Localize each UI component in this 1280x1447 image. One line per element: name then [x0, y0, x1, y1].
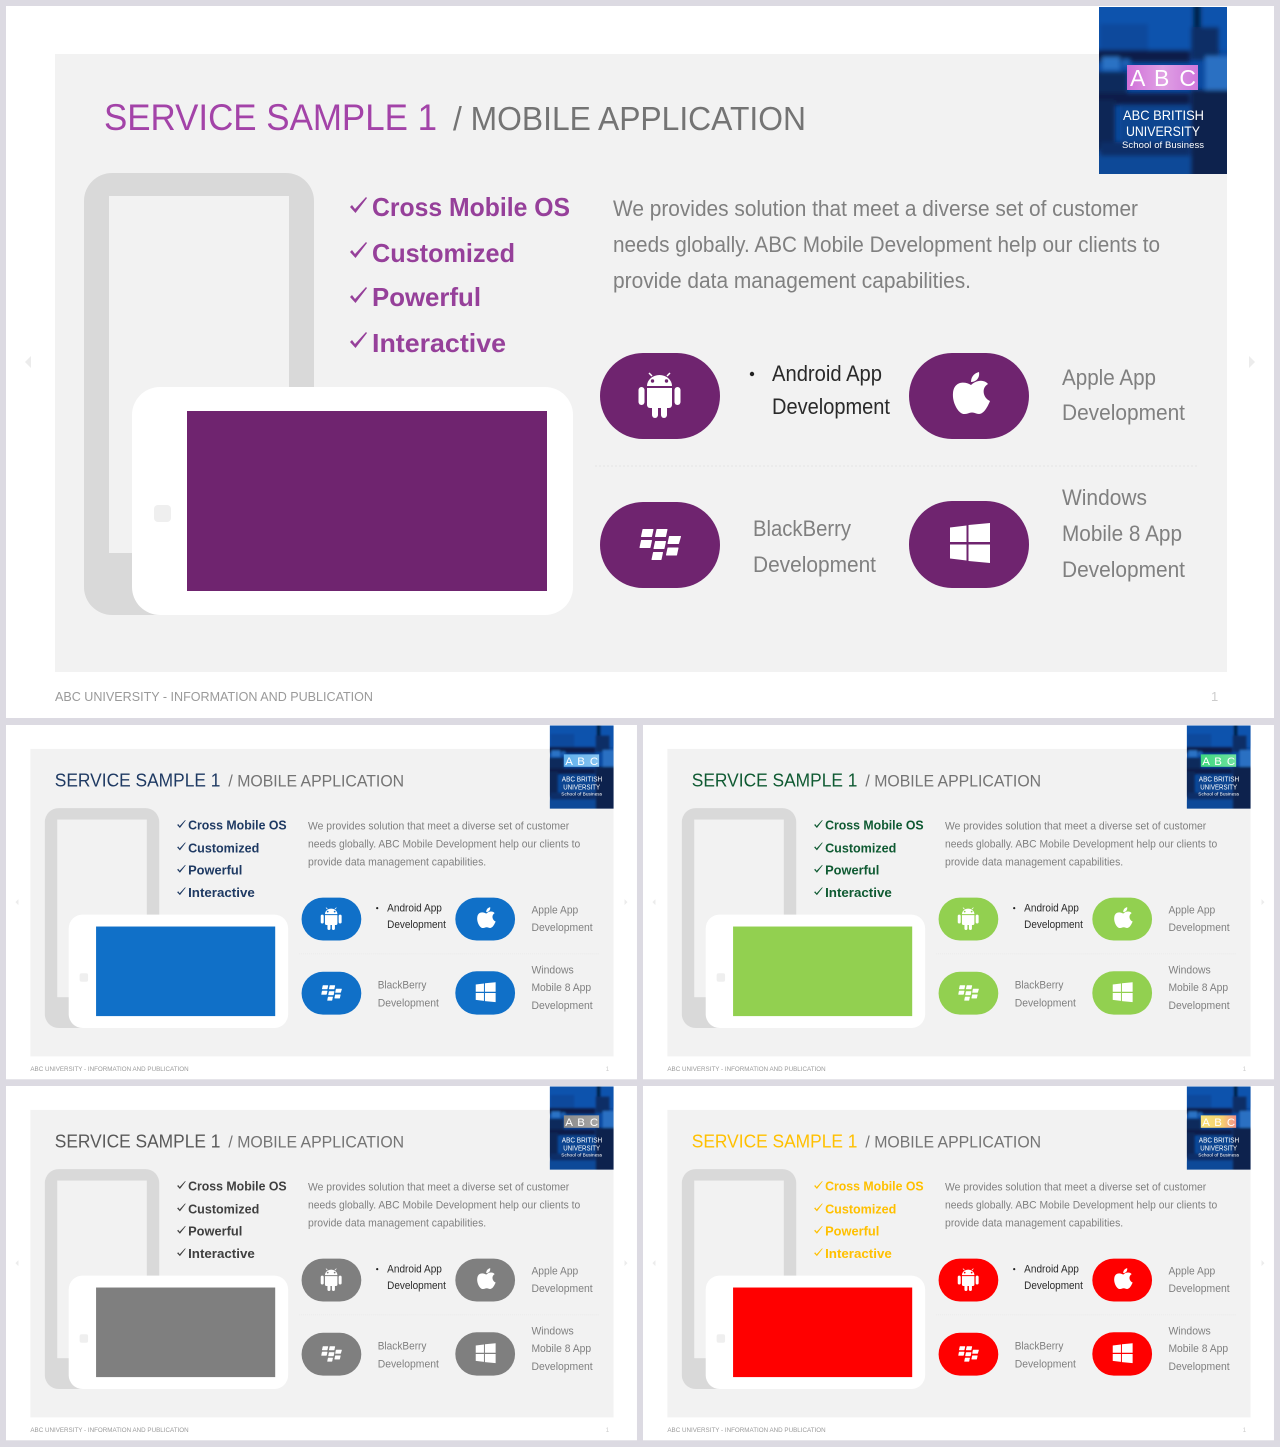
description text: provide data management capabilities. [945, 1217, 1123, 1229]
portrait phone [45, 1169, 159, 1389]
subtitle: / MOBILE APPLICATION [865, 773, 1041, 791]
label: windows [1168, 1325, 1230, 1373]
icon: windows [1092, 971, 1152, 1015]
slide: red and yellow [643, 1085, 1274, 1440]
description text: We provides solution that meet a diverse set of customer [945, 820, 1207, 832]
content panel [30, 1110, 614, 1417]
feature checklist: Cross Mobile OS [825, 1178, 924, 1193]
page number: 1 [1243, 1427, 1247, 1434]
slide: green [643, 724, 1274, 1079]
icon: android [302, 898, 361, 940]
feature checklist: Customized [825, 1201, 896, 1216]
slide background [643, 725, 1274, 1079]
label: windows [1168, 964, 1230, 1012]
subtitle: / MOBILE APPLICATION [228, 773, 404, 791]
feature checklist: Interactive [825, 1246, 892, 1261]
portrait phone [682, 1169, 796, 1389]
icon: android [939, 1259, 998, 1301]
badge: ABC British University: School of Business [1198, 1153, 1240, 1159]
portrait phone [682, 808, 796, 1028]
label: android: Development [1024, 919, 1083, 931]
slide background [6, 1086, 637, 1440]
description text [945, 1181, 1217, 1229]
title: SERVICE SAMPLE 1 [692, 1131, 857, 1152]
landscape tablet [69, 915, 288, 1028]
label: apple: Development [1168, 922, 1230, 934]
label: android: Android App [387, 1264, 442, 1276]
label: apple: Development [531, 922, 593, 934]
page number: 1 [606, 1066, 610, 1073]
badge: ABC British University [1095, 3, 1231, 178]
content panel [30, 749, 614, 1056]
feature checklist: Cross Mobile OS [825, 817, 924, 832]
label: android: Development [387, 919, 446, 931]
badge: ABC British University: School of Business [1122, 140, 1204, 151]
label: android [750, 361, 890, 419]
badge: ABC British University [1185, 1085, 1253, 1172]
subtitle: / MOBILE APPLICATION [228, 1134, 404, 1152]
label: apple [531, 1266, 593, 1295]
description text: provide data management capabilities. [613, 268, 971, 293]
arrow: previous [652, 899, 655, 905]
label: blackberry: Development [753, 552, 876, 577]
label: apple [1062, 365, 1185, 425]
badge: ABC British University: ABC BRITISH [1123, 107, 1204, 123]
arrow: next [625, 1260, 628, 1266]
page number: 1 [1211, 689, 1218, 704]
label: windows [531, 1325, 593, 1373]
feature checklist: Customized [188, 1201, 259, 1216]
label: blackberry: BlackBerry [753, 516, 851, 541]
footer: ABC UNIVERSITY - INFORMATION AND PUBLICATION [55, 689, 373, 704]
arrow: next [1262, 1260, 1265, 1266]
description text [945, 820, 1217, 868]
badge: ABC British University: A B C [565, 756, 598, 768]
description text: We provides solution that meet a diverse set of customer [613, 196, 1138, 221]
label: android: Development [772, 394, 890, 419]
label: windows: Development [1062, 557, 1185, 582]
slide background [6, 725, 637, 1079]
label: windows: Development [531, 1000, 593, 1012]
feature checklist [350, 192, 570, 358]
badge: ABC British University: ABC BRITISH [1199, 777, 1239, 784]
badge: ABC British University: School of Business [1198, 792, 1240, 798]
feature checklist [814, 817, 924, 900]
feature checklist: Cross Mobile OS [188, 1178, 287, 1193]
description text: needs globally. ABC Mobile Development help our clients to [308, 838, 580, 850]
label: apple: Apple App [531, 905, 578, 917]
label: windows: Windows [531, 1325, 574, 1337]
badge: ABC British University: School of Business [561, 1153, 603, 1159]
badge: ABC British University [1185, 724, 1253, 811]
arrow: previous [15, 1260, 18, 1266]
slide background [6, 6, 1274, 718]
icon: windows [909, 501, 1029, 588]
badge: ABC British University: UNIVERSITY [1200, 1146, 1237, 1153]
arrow: next [1249, 356, 1255, 368]
label: blackberry [378, 980, 439, 1010]
badge: ABC British University: UNIVERSITY [563, 1146, 600, 1153]
feature checklist [177, 817, 287, 900]
slide: blue [6, 724, 637, 1079]
feature checklist: Interactive [188, 885, 255, 900]
icon: windows [455, 971, 515, 1015]
feature checklist: Interactive [188, 1246, 255, 1261]
feature checklist: Customized [188, 840, 259, 855]
label: apple: Development [1168, 1283, 1230, 1295]
feature checklist [814, 1178, 924, 1261]
feature checklist: Interactive [372, 328, 506, 358]
label: android [1013, 1264, 1083, 1292]
footer: ABC UNIVERSITY - INFORMATION AND PUBLICATION [667, 1066, 826, 1073]
feature checklist: Powerful [188, 1223, 242, 1238]
label: android: Development [387, 1280, 446, 1292]
label: blackberry: Development [1015, 998, 1076, 1010]
subtitle: / MOBILE APPLICATION [453, 100, 806, 137]
description text: provide data management capabilities. [308, 856, 486, 868]
label: windows: Mobile 8 App [531, 1343, 591, 1355]
portrait phone [84, 173, 314, 615]
subtitle: / MOBILE APPLICATION [865, 1134, 1041, 1152]
description text: needs globally. ABC Mobile Development help our clients to [945, 838, 1217, 850]
label: apple [1168, 905, 1230, 934]
label: windows: Windows [1062, 485, 1147, 510]
feature checklist: Powerful [372, 282, 481, 312]
badge: ABC British University: School of Business [561, 792, 603, 798]
label: apple: Development [531, 1283, 593, 1295]
label: windows [531, 964, 593, 1012]
label: android: Android App [1024, 903, 1079, 915]
label: windows: Mobile 8 App [1168, 1343, 1228, 1355]
slide: grey [6, 1085, 637, 1440]
label: apple: Development [1062, 400, 1185, 425]
label: android [376, 1264, 446, 1292]
feature checklist: Cross Mobile OS [188, 817, 287, 832]
content panel [667, 749, 1251, 1056]
label: apple [1168, 1266, 1230, 1295]
footer: ABC UNIVERSITY - INFORMATION AND PUBLICATION [30, 1427, 189, 1434]
label: blackberry: BlackBerry [378, 980, 427, 992]
arrow: previous [652, 1260, 655, 1266]
icon: blackberry [939, 1333, 998, 1376]
landscape tablet [132, 387, 573, 615]
badge: ABC British University: A B C [565, 1117, 598, 1129]
icon: apple [1092, 898, 1152, 940]
badge: ABC British University: ABC BRITISH [562, 777, 602, 784]
label: windows: Windows [531, 964, 574, 976]
label: android: Development [1024, 1280, 1083, 1292]
icon: android [302, 1259, 361, 1301]
badge: ABC British University: ABC BRITISH [562, 1138, 602, 1145]
label: blackberry: BlackBerry [1015, 1341, 1064, 1353]
icon: apple [455, 1259, 515, 1301]
badge: ABC British University: A B C [1202, 1117, 1235, 1129]
label: blackberry: Development [378, 998, 439, 1010]
landscape tablet [69, 1276, 288, 1389]
label: blackberry [1015, 980, 1076, 1010]
icon: apple [909, 353, 1029, 439]
label: android: Android App [1024, 1264, 1079, 1276]
label: blackberry [378, 1341, 439, 1371]
feature checklist: Powerful [188, 862, 242, 877]
icon: blackberry [302, 1333, 361, 1376]
arrow: previous [25, 356, 31, 368]
page number: 1 [606, 1427, 610, 1434]
icon: android [600, 353, 720, 439]
description text: We provides solution that meet a diverse set of customer [308, 820, 570, 832]
title: SERVICE SAMPLE 1 [55, 770, 220, 791]
feature checklist: Cross Mobile OS [372, 192, 570, 222]
description text: needs globally. ABC Mobile Development help our clients to [945, 1199, 1217, 1211]
badge: ABC British University: UNIVERSITY [1126, 123, 1201, 139]
label: android [376, 903, 446, 931]
description text: provide data management capabilities. [945, 856, 1123, 868]
footer: ABC UNIVERSITY - INFORMATION AND PUBLICATION [30, 1066, 189, 1073]
label: windows: Mobile 8 App [1062, 521, 1182, 546]
badge: ABC British University: A B C [1202, 756, 1235, 768]
icon: blackberry [302, 972, 361, 1015]
icon: blackberry [600, 502, 720, 588]
title: SERVICE SAMPLE 1 [692, 770, 857, 791]
feature checklist [177, 1178, 287, 1261]
footer: ABC UNIVERSITY - INFORMATION AND PUBLICATION [667, 1427, 826, 1434]
landscape tablet [706, 1276, 925, 1389]
label: windows: Mobile 8 App [531, 982, 591, 994]
label: windows: Development [531, 1361, 593, 1373]
badge: ABC British University: UNIVERSITY [1200, 785, 1237, 792]
label: blackberry: BlackBerry [378, 1341, 427, 1353]
title: SERVICE SAMPLE 1 [55, 1131, 220, 1152]
description text: provide data management capabilities. [308, 1217, 486, 1229]
icon: android [939, 898, 998, 940]
slide: purple main [6, 3, 1274, 718]
label: windows: Mobile 8 App [1168, 982, 1228, 994]
label: windows: Windows [1168, 964, 1211, 976]
label: apple: Apple App [1062, 365, 1156, 390]
slide background [643, 1086, 1274, 1440]
arrow: previous [15, 899, 18, 905]
badge: ABC British University: UNIVERSITY [563, 785, 600, 792]
label: apple: Apple App [1168, 1266, 1215, 1278]
arrow: next [1262, 899, 1265, 905]
icon: windows [455, 1332, 515, 1376]
description text: We provides solution that meet a diverse set of customer [945, 1181, 1207, 1193]
arrow: next [625, 899, 628, 905]
description text: We provides solution that meet a diverse set of customer [308, 1181, 570, 1193]
content panel [667, 1110, 1251, 1417]
label: android [1013, 903, 1083, 931]
content panel [55, 54, 1227, 672]
badge: ABC British University [548, 724, 616, 811]
label: windows: Development [1168, 1000, 1230, 1012]
label: apple [531, 905, 593, 934]
description text [613, 196, 1160, 293]
feature checklist: Interactive [825, 885, 892, 900]
label: blackberry [1015, 1341, 1076, 1371]
label: android: Android App [772, 361, 882, 386]
feature checklist: Powerful [825, 862, 879, 877]
label: blackberry [753, 516, 876, 577]
badge: ABC British University: A B C [1130, 65, 1196, 91]
feature checklist: Powerful [825, 1223, 879, 1238]
label: blackberry: Development [378, 1359, 439, 1371]
label: windows [1062, 485, 1185, 582]
title: SERVICE SAMPLE 1 [104, 97, 437, 138]
label: blackberry: Development [1015, 1359, 1076, 1371]
label: apple: Apple App [1168, 905, 1215, 917]
feature checklist: Customized [372, 238, 515, 268]
label: apple: Apple App [531, 1266, 578, 1278]
icon: blackberry [939, 972, 998, 1015]
icon: apple [455, 898, 515, 940]
description text: needs globally. ABC Mobile Development help our clients to [613, 232, 1160, 257]
label: windows: Development [1168, 1361, 1230, 1373]
description text [308, 820, 580, 868]
label: blackberry: BlackBerry [1015, 980, 1064, 992]
label: windows: Windows [1168, 1325, 1211, 1337]
description text: needs globally. ABC Mobile Development help our clients to [308, 1199, 580, 1211]
icon: apple [1092, 1259, 1152, 1301]
badge: ABC British University [548, 1085, 616, 1172]
feature checklist: Customized [825, 840, 896, 855]
badge: ABC British University: ABC BRITISH [1199, 1138, 1239, 1145]
page number: 1 [1243, 1066, 1247, 1073]
icon: windows [1092, 1332, 1152, 1376]
label: android: Android App [387, 903, 442, 915]
landscape tablet [706, 915, 925, 1028]
portrait phone [45, 808, 159, 1028]
description text [308, 1181, 580, 1229]
